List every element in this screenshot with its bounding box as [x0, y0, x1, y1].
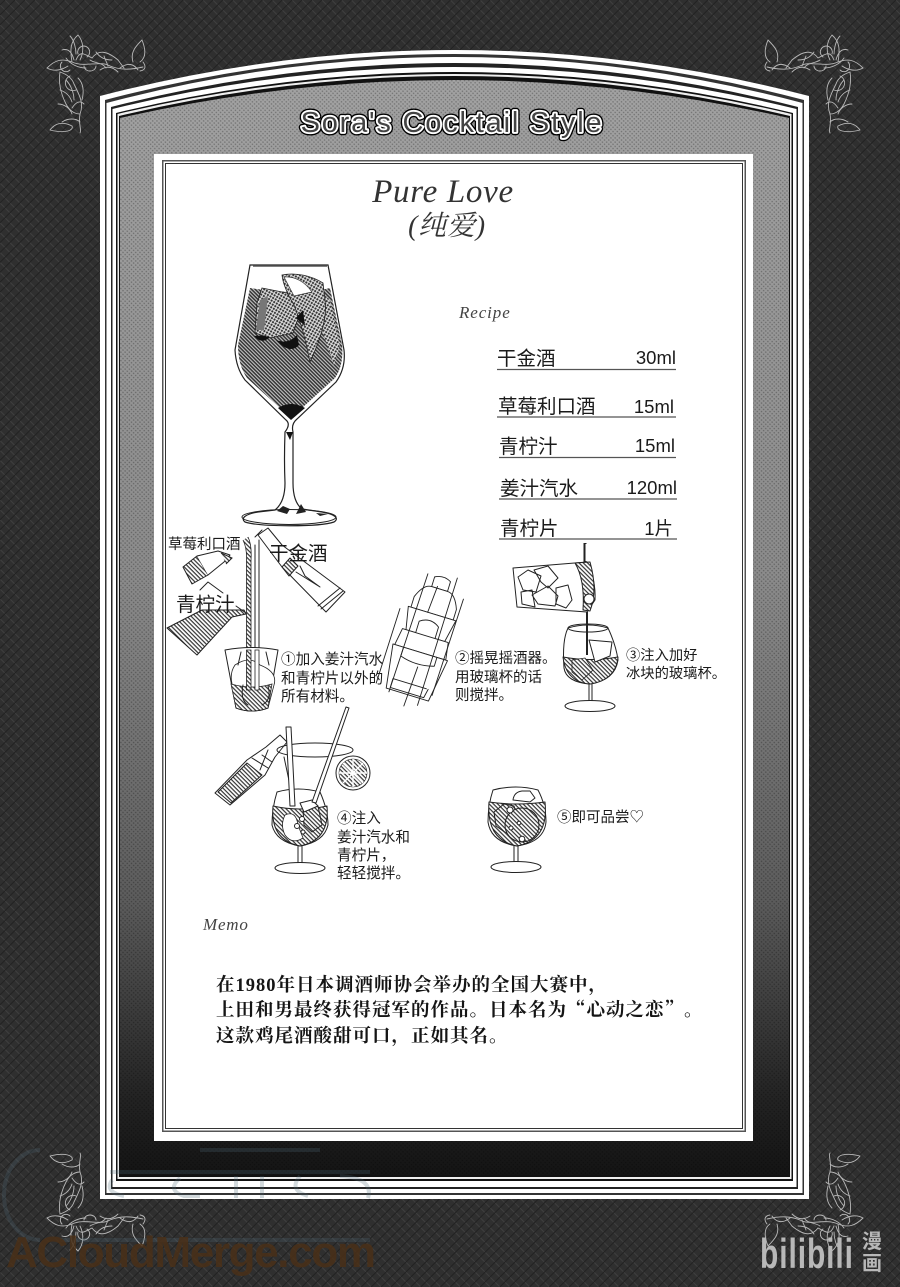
ingredient: ginger ale: 姜汁汽水: [500, 478, 578, 500]
title banner: Sora's Cocktail Style: [301, 107, 603, 139]
label: lime juice: 青柠汁: [176, 594, 235, 616]
step 2 text: ②摇晃摇酒器。: [455, 650, 556, 667]
main illustration: wine glass: [235, 265, 344, 526]
step 2 illustration: shaker in motion: [372, 564, 471, 714]
corner ornament: bottom left: [47, 1153, 145, 1251]
ingredient: lime slice: 青柠片: [500, 518, 559, 540]
step 1 illustration: pouring ingredients into a glass: [167, 528, 345, 711]
ingredient: strawberry liqueur: [497, 396, 676, 418]
memo text block: 在1980年日本调酒师协会举办的全国大赛中，: [216, 974, 608, 996]
ingredient: lime juice: [499, 435, 676, 458]
cocktail name heading: [371, 174, 514, 242]
step 5 text: ⑤即可品尝♡: [557, 809, 644, 826]
arched frame with gradient panel: [100, 50, 809, 1199]
step 4 text: 青柠片，: [337, 847, 395, 864]
ingredient: lime juice: 青柠汁: [499, 436, 558, 458]
watermark: faint blue logo mark: [4, 1150, 370, 1240]
ingredient: ginger ale: 120ml: [627, 477, 677, 498]
ingredient: ginger ale: [499, 477, 677, 500]
label: gin: 干金酒: [269, 543, 328, 565]
step 1 text: 所有材料。: [281, 688, 354, 705]
cocktail name heading: Pure Love: [371, 174, 514, 210]
logo: bilibili manga: 漫: [862, 1230, 882, 1253]
step 3 illustration: straining into a glass: [513, 543, 618, 712]
corner ornament: top right: [765, 35, 863, 133]
step 2 text: 则搅拌。: [455, 687, 513, 704]
corner ornament: bottom right: [765, 1153, 863, 1251]
ingredient: lime slice: 1片: [644, 518, 673, 539]
section label: recipe: Recipe: [458, 303, 511, 322]
watermark: site name: ACloudMerge.com: [6, 1228, 376, 1277]
step 1 text: ①加入姜汁汽水: [281, 651, 384, 668]
ingredient: lime juice: 15ml: [635, 435, 675, 456]
label: strawberry liqueur: 草莓利口酒: [168, 536, 240, 553]
step 5 illustration: finished cocktail: [488, 787, 546, 872]
title banner: Sora's Cocktail Style: [301, 107, 603, 139]
step 4 text: ④注入: [337, 810, 381, 827]
ingredient: gin: 干金酒: [497, 348, 556, 370]
step 3 text: ③注入加好: [626, 647, 697, 664]
step 4 text: 姜汁汽水和: [337, 829, 410, 846]
memo text block: 这款鸡尾酒酸甜可口，正如其名。: [216, 1022, 509, 1048]
ingredient: gin: 30ml: [636, 347, 676, 368]
logo: bilibili manga: bilibili: [760, 1230, 853, 1277]
step 4 illustration: ginger ale and lime: [215, 707, 370, 874]
title banner: Sora's Cocktail Style: [301, 107, 603, 139]
step 3 text: 冰块的玻璃杯。: [626, 665, 726, 682]
step 1 text: 和青柠片以外的: [281, 670, 383, 687]
logo: bilibili manga: 画: [862, 1253, 882, 1275]
corner ornament: top left: [47, 35, 145, 133]
step 4 text: 轻轻搅拌。: [337, 865, 410, 882]
cocktail name heading: (纯爱): [408, 211, 486, 242]
panel: white recipe card: [154, 154, 753, 1141]
step 2 text: 用玻璃杯的话: [455, 669, 542, 686]
ingredient list: [497, 347, 677, 540]
ingredient: strawberry liqueur: 15ml: [634, 396, 674, 417]
ingredient: gin: [497, 347, 676, 370]
memo text block: 上田和男最终获得冠军的作品。日本名为“心动之恋”。: [216, 996, 704, 1022]
ingredient: lime slice: [499, 518, 677, 540]
section label: memo: Memo: [202, 915, 249, 934]
ingredient: strawberry liqueur: 草莓利口酒: [498, 396, 596, 418]
